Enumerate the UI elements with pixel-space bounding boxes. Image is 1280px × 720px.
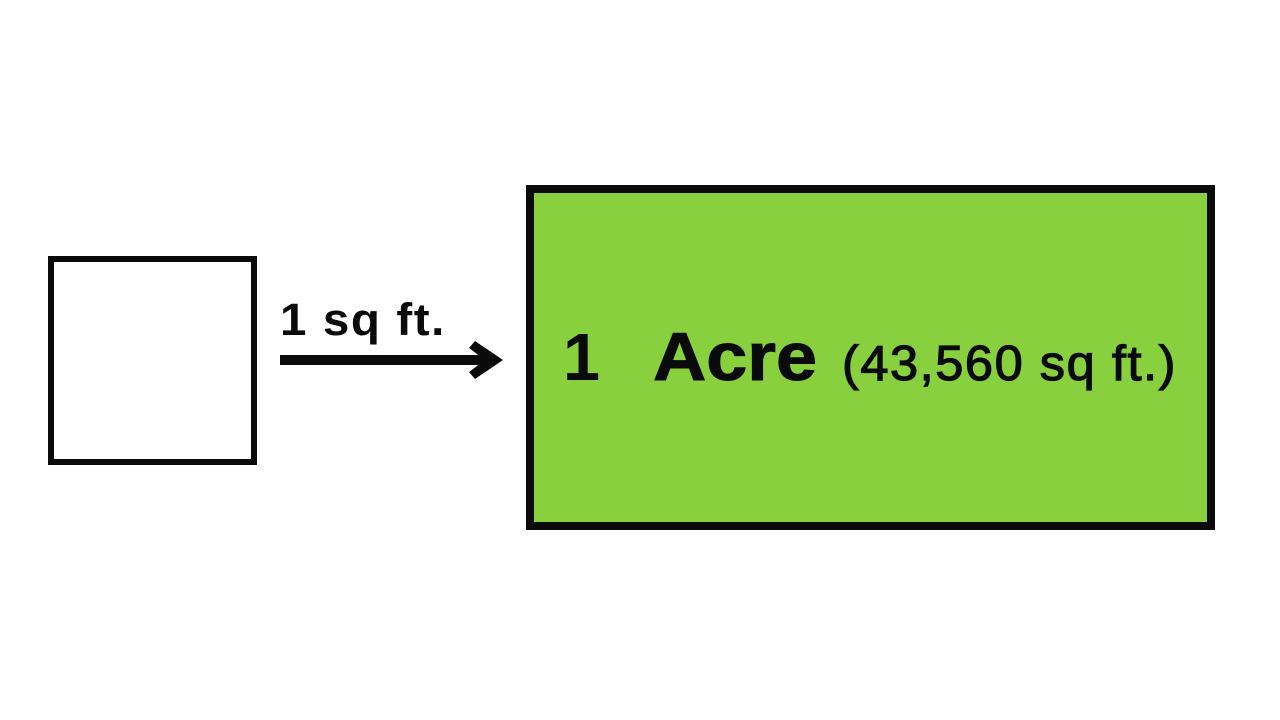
label: 1 Acre (43,560 sq ft.): Acre xyxy=(653,319,817,395)
small white square: 1 sq ft xyxy=(51,259,254,462)
arrow xyxy=(280,341,503,379)
label: 1 Acre (43,560 sq ft.): (43,560 sq ft.) xyxy=(842,337,1177,391)
green acre rectangle xyxy=(530,189,1211,526)
label: 1 sq ft.: 1 sq ft. xyxy=(280,294,446,345)
label: 1 Acre (43,560 sq ft.): 1 xyxy=(563,320,600,395)
label: 1 Acre (43,560 sq ft.) xyxy=(563,319,1177,395)
